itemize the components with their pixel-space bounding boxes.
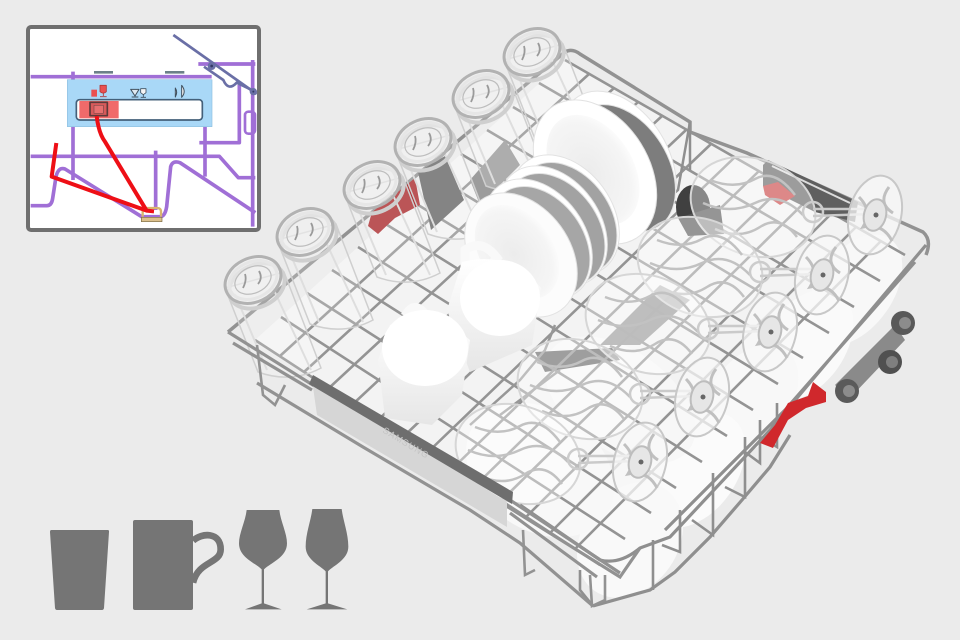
inset diagram: rack latch detail (28, 27, 259, 230)
icon: tall wine glass (306, 509, 348, 609)
inset: slate upper wire (173, 35, 257, 94)
wine glasses lying on rack (441, 140, 910, 521)
wire grid (255, 60, 905, 565)
tall back tine frame (660, 122, 690, 205)
top right grey bracket (763, 160, 858, 222)
icon: tumbler (50, 530, 109, 610)
red latch (760, 382, 826, 448)
glass tumbler row (217, 20, 600, 377)
black roller (676, 185, 724, 236)
grey clip behind glasses (418, 156, 464, 230)
dark centre support (535, 348, 620, 372)
front handle (309, 375, 513, 527)
dishware icons (50, 509, 348, 610)
rack floor (255, 60, 905, 565)
red lever behind glasses (368, 178, 420, 234)
centre rack tines (470, 325, 560, 425)
inset: purple wire frame (31, 60, 255, 227)
stacked plates (441, 70, 700, 339)
right side runner with wheels (835, 311, 915, 403)
inset: tan clip (141, 208, 162, 222)
dish rack (217, 20, 928, 618)
back top rail (228, 50, 928, 332)
icon: wide wine glass (239, 510, 287, 609)
inset: red wire path (52, 116, 154, 211)
icon: mug (133, 520, 221, 610)
white bowls along right rail (440, 217, 922, 618)
right rail and lower zigzag wires (520, 245, 926, 606)
inset: blue control panel (67, 80, 212, 127)
white mugs (378, 246, 541, 425)
front handle: SAMSUNG (381, 425, 431, 461)
front left rails (228, 332, 640, 606)
